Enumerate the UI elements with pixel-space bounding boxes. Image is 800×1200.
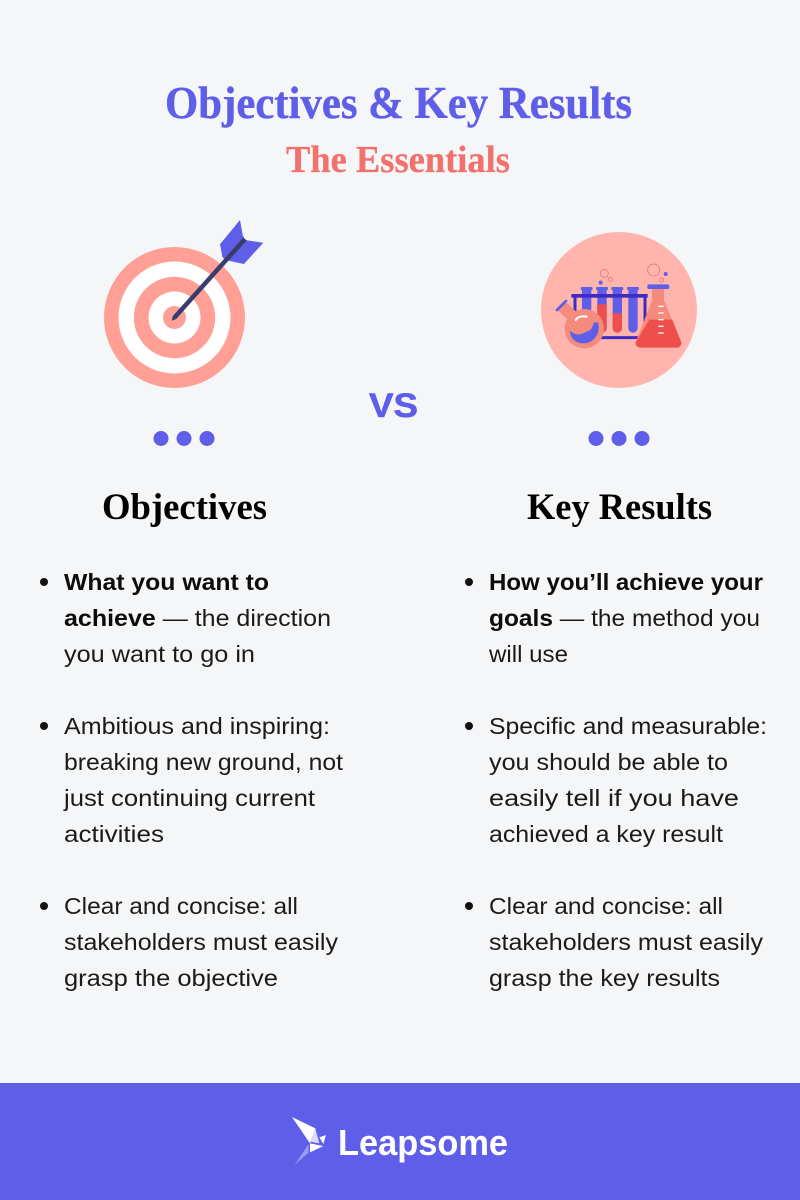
key results bullet 2: easily tell if you have — [489, 785, 739, 811]
objectives bullet 3: stakeholders must easily — [64, 929, 339, 955]
key results bullet 1: How you’ll achieve your — [489, 569, 763, 595]
objectives bullet 1 — [40, 569, 331, 667]
heading: objectives: Objectives — [102, 487, 267, 528]
key results bullet 2: achieved a key result — [489, 821, 724, 847]
dots: key results — [588, 431, 650, 446]
key results bullet 3: Clear and concise: all — [489, 893, 723, 919]
key results bullet 2: you should be able to — [489, 749, 728, 775]
versus label: VS — [369, 387, 418, 425]
key results bullet 3: grasp the key results — [489, 965, 720, 991]
key results bullet 2 — [465, 713, 767, 847]
objectives bullet 1: What you want to — [64, 569, 269, 595]
key results bullet 1: will use — [488, 641, 568, 667]
objectives bullet 3: Clear and concise: all — [64, 893, 298, 919]
objectives bullet 3 — [40, 893, 339, 991]
icon: laboratory glassware — [541, 232, 697, 388]
logo wordmark: Leapsome — [338, 1122, 508, 1163]
dots: objectives — [154, 431, 214, 446]
objectives bullet 2: breaking new ground, not — [64, 749, 344, 775]
objectives bullet 2: Ambitious and inspiring: — [64, 713, 330, 739]
subtitle: The Essentials — [286, 139, 510, 181]
objectives bullet 1: achieve — the direction — [64, 605, 331, 631]
icon: Leapsome bird logo — [292, 1117, 326, 1165]
objectives bullet 2 — [40, 713, 344, 847]
title: Objectives & Key Results — [165, 78, 632, 128]
objectives bullet 1: you want to go in — [64, 641, 255, 667]
key results bullet 1 — [465, 569, 763, 667]
objectives bullet 3: grasp the objective — [64, 965, 278, 991]
key results bullet 2: Specific and measurable: — [489, 713, 767, 739]
key results bullet 3: stakeholders must easily — [489, 929, 764, 955]
icon: target with arrow — [104, 220, 263, 388]
key results bullet 3 — [465, 893, 764, 991]
objectives bullet 2: activities — [64, 821, 164, 847]
heading: key results: Key Results — [527, 487, 712, 528]
key results bullet 1: goals — the method you — [489, 605, 760, 631]
objectives bullet 2: just continuing current — [63, 785, 316, 811]
footer band — [0, 1083, 800, 1200]
